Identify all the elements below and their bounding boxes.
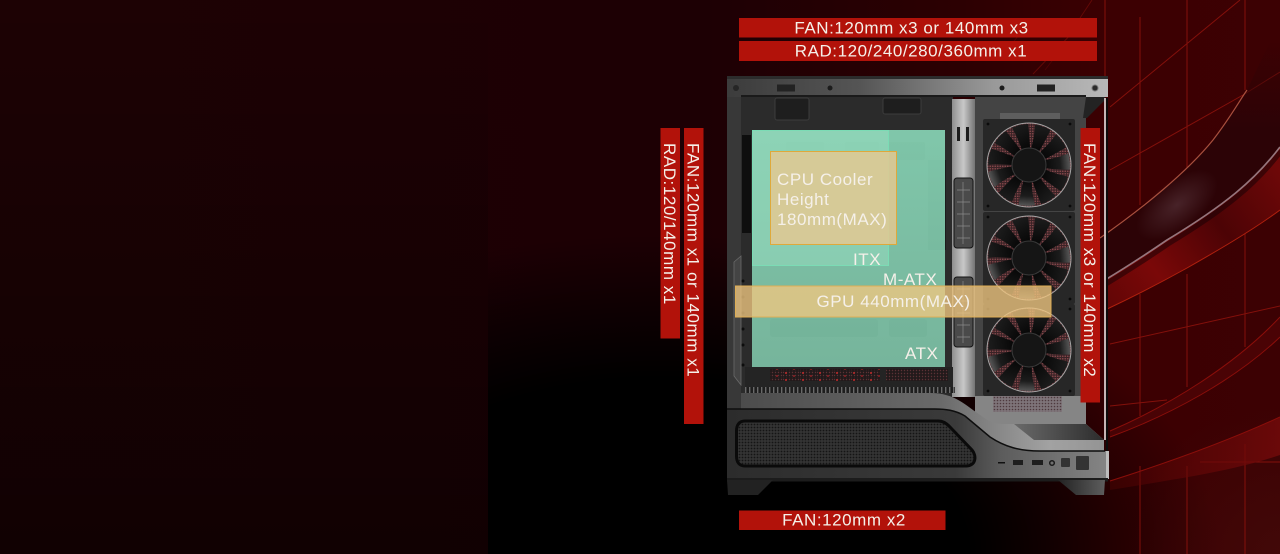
top rail <box>727 76 1108 97</box>
right foot <box>1058 480 1105 495</box>
shroud front <box>727 409 1106 478</box>
shroud floor <box>1014 424 1104 440</box>
lower curved bands <box>1110 317 1280 490</box>
left wall <box>727 97 741 410</box>
IO panel <box>998 451 1109 479</box>
compatibility zone: ATX <box>752 130 945 367</box>
CPU cooler text: Height <box>777 190 829 209</box>
CPU cooler text: CPU Cooler <box>777 170 873 189</box>
lower vent strips <box>745 367 955 393</box>
lower rear wall <box>975 396 1086 426</box>
label: M-ATX: M-ATX <box>883 270 937 289</box>
left radiator label: RAD:120/140mm x1 <box>660 143 679 305</box>
top radiator label: RAD:120/240/280/360mm x1 <box>795 42 1027 60</box>
top fan label <box>739 18 1097 38</box>
case interior <box>741 97 953 397</box>
cable tabs <box>775 98 921 120</box>
PSU shroud swoop <box>741 393 1104 451</box>
left fan label: FAN:120mm x1 or 140mm x1 <box>684 143 702 377</box>
bottom fan label: FAN:120mm x2 <box>782 510 906 530</box>
CPU cooler text: 180mm(MAX) <box>777 210 887 229</box>
top fan label: FAN:120mm x3 or 140mm x3 <box>794 18 1029 38</box>
left foot <box>727 480 773 495</box>
GPU text: GPU 440mm(MAX) <box>816 292 971 311</box>
rear expansion slots <box>734 256 744 385</box>
GPU bar <box>736 286 1051 317</box>
right fan label: FAN:120mm x3 or 140mm x2 <box>1080 143 1099 377</box>
label: ITX: ITX <box>853 250 881 269</box>
fan 1 <box>983 119 1075 211</box>
CPU cooler box <box>770 152 896 244</box>
tray cutouts <box>770 142 946 337</box>
corner bracket <box>1083 97 1105 118</box>
compatibility zone: ITX <box>752 130 888 269</box>
bottom fan label <box>739 510 946 530</box>
PC case <box>727 76 1109 495</box>
fan column <box>975 113 1086 426</box>
case base strip <box>727 478 1108 482</box>
top radiator label <box>739 41 1097 61</box>
fan 2 <box>983 212 1075 304</box>
label: ATX: ATX <box>905 344 938 363</box>
interior right bay <box>975 97 1086 397</box>
fan 3 <box>983 304 1075 396</box>
central pillar <box>952 99 975 397</box>
right glass edge <box>1104 98 1108 452</box>
curved disc <box>1100 0 1280 310</box>
side fan left <box>742 135 751 233</box>
front mesh grille <box>736 421 975 466</box>
